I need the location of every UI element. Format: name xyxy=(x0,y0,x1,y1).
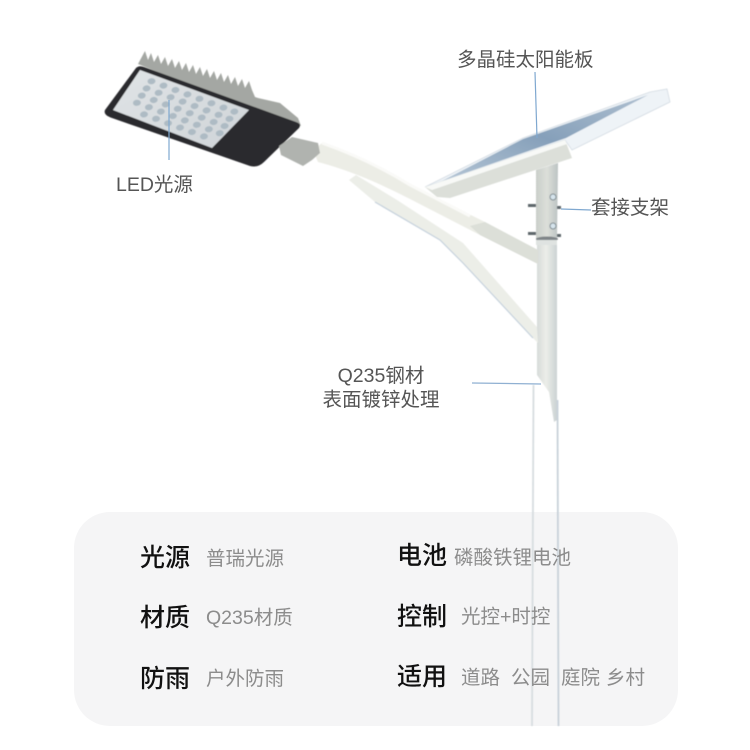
spec: application xyxy=(397,663,645,691)
label: steel material: 表面镀锌处理 xyxy=(322,389,440,411)
leader line: LED source xyxy=(168,100,170,160)
leader line: sleeve bracket xyxy=(561,209,591,210)
label: LED source: LED光源 xyxy=(116,174,193,196)
lower curved arm xyxy=(349,175,538,343)
label: solar panel: 多晶硅太阳能板 xyxy=(457,49,594,71)
spec: control xyxy=(397,603,550,631)
spec: application: 乡村 xyxy=(606,667,645,689)
spec: material: Q235材质 xyxy=(206,607,293,629)
pole upper sleeve with bolts xyxy=(528,163,561,245)
panel: specification background xyxy=(74,512,678,726)
spec: application: 公园 xyxy=(511,667,550,689)
solar panel xyxy=(425,89,670,198)
spec: material: 材质 xyxy=(140,604,190,632)
leader line: solar panel xyxy=(535,72,537,138)
pole lower section xyxy=(532,240,558,726)
heat sink fins xyxy=(138,51,301,126)
LED lens panel xyxy=(113,70,249,148)
spec: rainproof: 防雨 xyxy=(140,665,190,693)
spec: light source: 普瑞光源 xyxy=(206,548,284,570)
upper arm xyxy=(313,143,538,264)
spec: light source: 光源 xyxy=(140,544,190,572)
spec: application: 庭院 xyxy=(561,667,600,689)
spec: application: 适用 xyxy=(397,663,447,691)
spec: light source xyxy=(140,544,284,572)
label: steel material xyxy=(322,365,440,411)
LED lamp head xyxy=(105,51,320,166)
spec: battery xyxy=(397,542,571,570)
lamp housing xyxy=(105,66,300,166)
LED array xyxy=(127,77,240,144)
label: steel material: Q235钢材 xyxy=(338,365,424,387)
spec: application: 道路 xyxy=(461,667,500,689)
spec: rainproof xyxy=(140,665,284,693)
spec: control: 控制 xyxy=(397,603,447,631)
leader line: steel xyxy=(472,383,541,384)
spec: rainproof: 户外防雨 xyxy=(206,668,284,690)
spec: battery: 磷酸铁锂电池 xyxy=(454,547,571,569)
lamp bracket xyxy=(279,137,320,166)
spec: control: 光控+时控 xyxy=(461,606,550,628)
spec: material xyxy=(140,604,293,632)
spec: battery: 电池 xyxy=(397,542,447,570)
label: sleeve bracket: 套接支架 xyxy=(591,197,669,219)
